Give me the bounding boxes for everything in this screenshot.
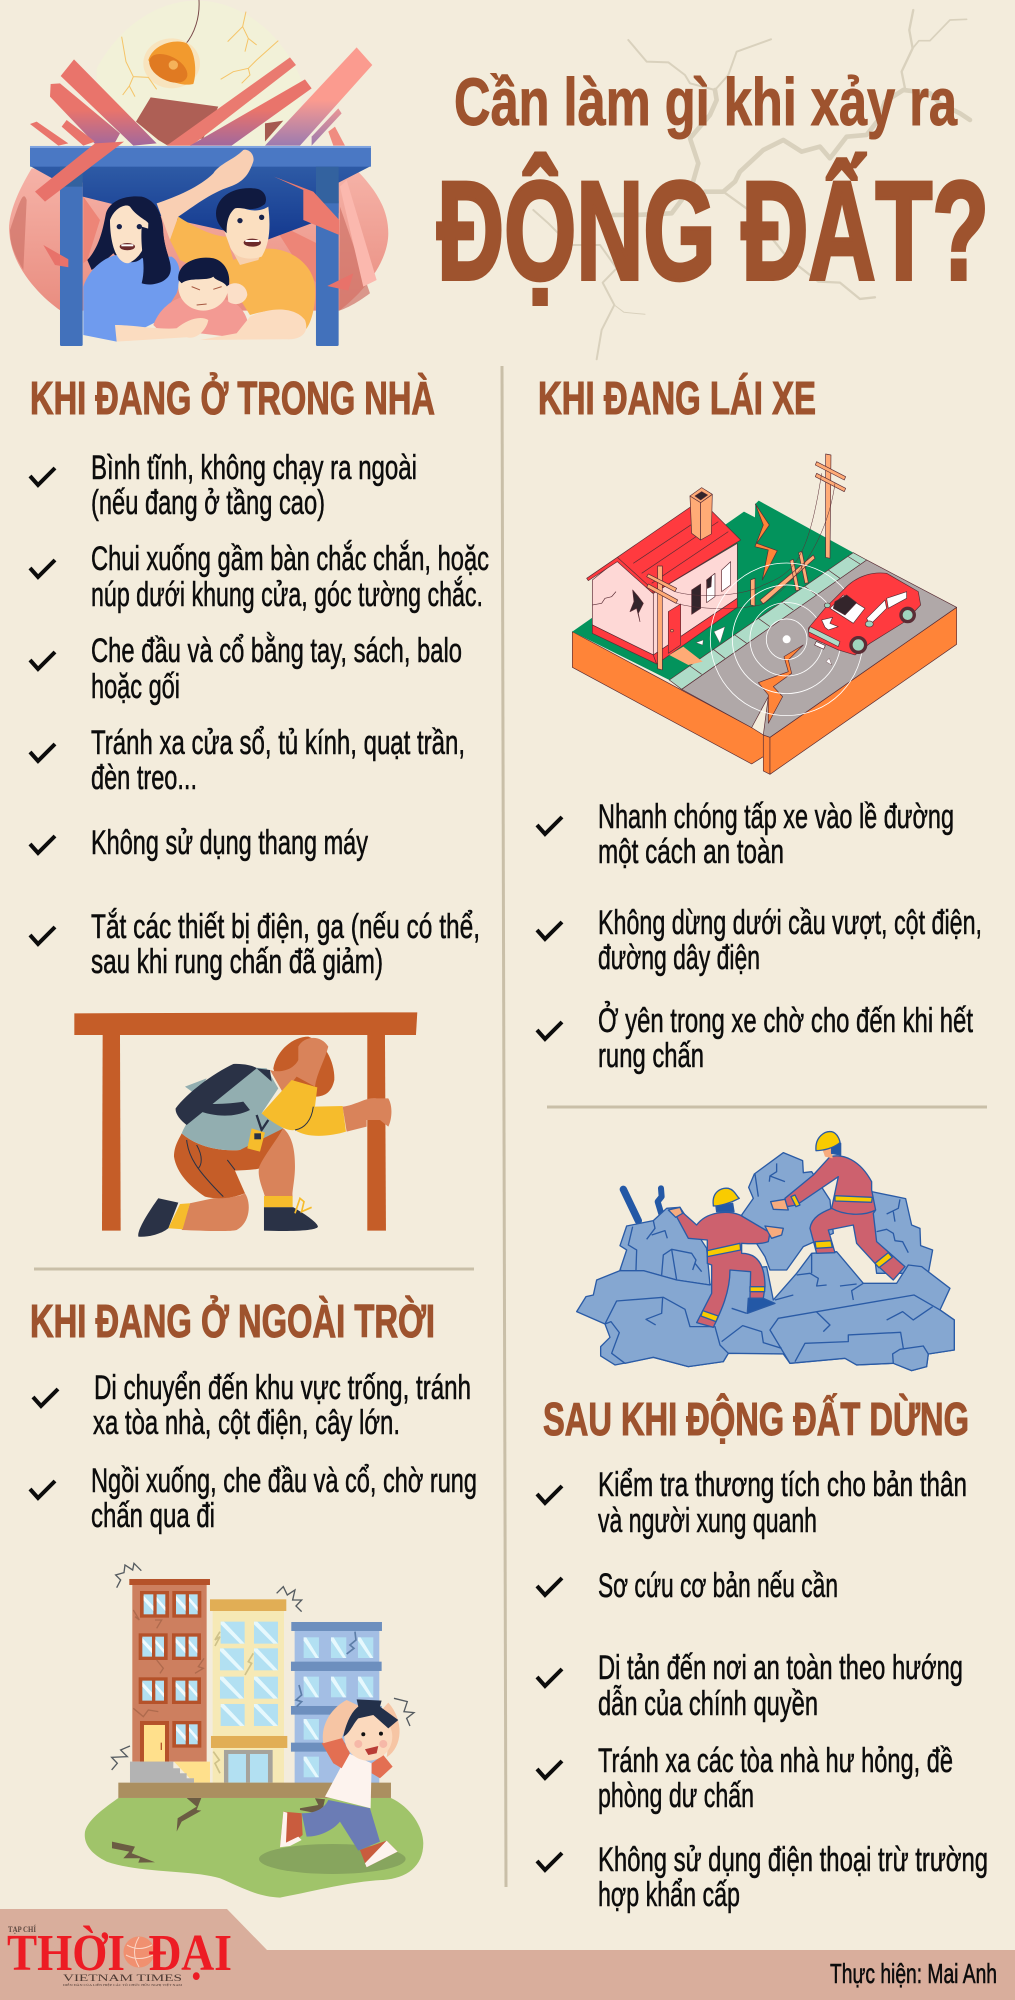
panel: after the quake <box>537 1393 988 1914</box>
item 6: Tắt các thiết bị điện, ga (nếu có thể, <box>91 908 480 946</box>
shake marks <box>112 1563 414 1770</box>
panel: indoors <box>30 372 489 981</box>
boy <box>280 1699 400 1867</box>
power poles <box>647 454 846 670</box>
logo: ĐẠI <box>148 1925 232 1982</box>
table <box>30 146 371 346</box>
divider left <box>34 1268 474 1270</box>
title <box>437 65 989 309</box>
heading: outdoors: KHI ĐANG Ở NGOÀI TRỜI <box>30 1295 435 1347</box>
item 1 <box>537 798 954 871</box>
illustration: house, road and car <box>572 454 957 774</box>
heading: indoors: KHI ĐANG Ở TRONG NHÀ <box>30 372 435 424</box>
item 3: rung chấn <box>598 1037 704 1075</box>
item 1: (nếu đang ở tầng cao) <box>91 484 325 522</box>
item 2: Sơ cứu cơ bản nếu cần <box>598 1567 838 1605</box>
item 1: xa tòa nhà, cột điện, cây lớn. <box>93 1404 400 1442</box>
house <box>587 488 741 665</box>
item 4: Tránh xa cửa sổ, tủ kính, quạt trần, <box>91 724 465 762</box>
item 2 <box>537 1567 838 1605</box>
illustration: family under table <box>9 0 388 346</box>
item 2 <box>30 540 489 614</box>
item 2: Ngồi xuống, che đầu và cổ, chờ rung <box>91 1462 477 1500</box>
pink lower blob <box>9 167 388 311</box>
item 2: Chui xuống gầm bàn chắc chắn, hoặc <box>91 540 489 578</box>
item 3 <box>537 1649 963 1723</box>
cream back shape <box>97 1 302 147</box>
logo: DIỄN ĐÀN CỦA LIÊN HIỆP CÁC TỔ CHỨC HỮU NGHỊ VIỆT NAM <box>63 1982 183 1987</box>
item 3: hoặc gối <box>91 668 180 706</box>
item 1: một cách an toàn <box>598 833 784 871</box>
item 4 <box>30 724 465 797</box>
yellow building <box>210 1599 287 1783</box>
item 2 <box>537 904 982 977</box>
item 3: Che đầu và cổ bằng tay, sách, balo <box>91 632 462 670</box>
item 1 <box>33 1369 471 1442</box>
car <box>808 573 921 655</box>
falling planks <box>30 47 372 146</box>
footer band <box>0 1909 1015 2000</box>
child <box>115 258 306 342</box>
item 2: đường dây điện <box>598 939 760 977</box>
divider right <box>547 1106 987 1108</box>
panel: driving <box>537 372 982 1075</box>
lamp <box>143 0 200 89</box>
logo: THỜI <box>7 1924 125 1982</box>
heading: driving: KHI ĐANG LÁI XE <box>538 372 816 424</box>
logo: VIETNAM TIMES <box>63 1973 182 1983</box>
item 2: núp dưới khung cửa, góc tường chắc. <box>91 576 483 614</box>
logo <box>7 1924 232 1987</box>
item 3 <box>30 632 462 706</box>
vertical divider <box>502 366 506 1887</box>
father <box>170 188 315 330</box>
background cracks <box>533 10 970 359</box>
rescuer left <box>668 1188 783 1327</box>
ground <box>85 1798 423 1898</box>
illustration: buildings and running boy <box>85 1563 423 1898</box>
panel: outdoors <box>30 1295 477 1535</box>
item 5 <box>30 824 368 862</box>
item 2 <box>30 1462 477 1535</box>
item 4: đèn treo... <box>91 759 197 797</box>
item 1: Di chuyển đến khu vực trống, tránh <box>94 1369 471 1407</box>
plank fragments in front <box>35 142 124 202</box>
rescuer right <box>771 1132 905 1280</box>
item 3 <box>537 1002 973 1075</box>
item 3: dẫn của chính quyền <box>598 1685 818 1723</box>
mother <box>83 150 254 342</box>
foundation <box>118 1783 391 1798</box>
illustration: rescuers on rubble <box>577 1132 954 1371</box>
item 5: Không sử dụng thang máy <box>91 824 368 862</box>
item 2: chấn qua đi <box>91 1497 215 1535</box>
illustration: person under table <box>74 1012 417 1237</box>
item 6: sau khi rung chấn đã giảm) <box>91 943 383 981</box>
brick building <box>129 1579 210 1783</box>
ground block <box>572 501 957 774</box>
item 4: phòng dư chấn <box>598 1777 754 1815</box>
item 5: hợp khẩn cấp <box>598 1876 740 1914</box>
ceiling cracks <box>122 12 278 97</box>
item 5 <box>537 1841 988 1914</box>
item 1 <box>537 1466 967 1540</box>
logo: TẠP CHÍ <box>8 1924 36 1934</box>
blue building <box>291 1622 382 1783</box>
item 1: và người xung quanh <box>598 1502 817 1540</box>
item 6 <box>30 908 480 981</box>
item 1: Bình tĩnh, không chạy ra ngoài <box>91 449 417 487</box>
rubble <box>577 1153 954 1371</box>
shockwave rings <box>696 563 863 716</box>
item 1 <box>30 449 417 522</box>
item 4 <box>537 1742 953 1815</box>
